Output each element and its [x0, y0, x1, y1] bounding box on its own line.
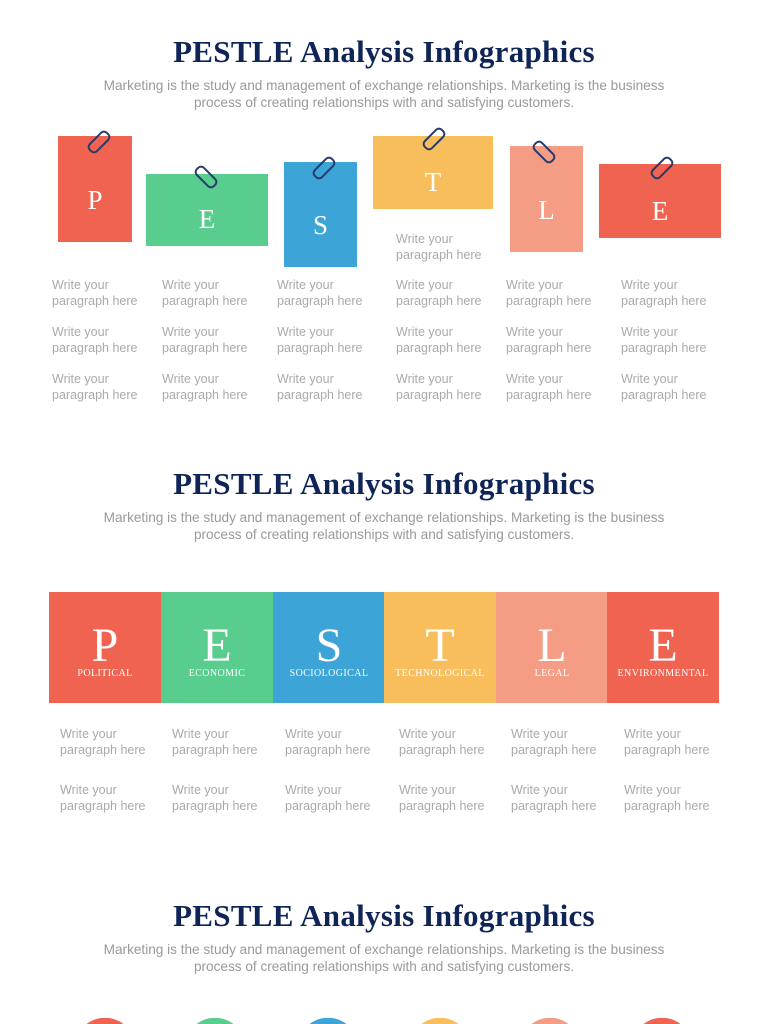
- box: technological: TECHNOLOGICAL: [395, 668, 485, 679]
- box: political: P: [92, 619, 118, 672]
- note: S: [284, 162, 357, 267]
- text grid 2: Write your paragraph here: [624, 783, 709, 813]
- text grid 1: Write your paragraph here: [52, 325, 137, 355]
- note: T: [373, 136, 493, 209]
- box: environmental: ENVIRONMENTAL: [617, 668, 709, 679]
- title 2: PESTLE Analysis Infographics: [173, 466, 595, 501]
- note: P: P: [87, 184, 103, 214]
- note: L: [510, 146, 583, 252]
- text grid 2: Write your paragraph here: [60, 783, 145, 813]
- text grid 1: Write your paragraph here: [162, 325, 247, 355]
- note: P: [58, 136, 132, 242]
- text grid 1: Write your paragraph here: [506, 372, 591, 402]
- text grid 2: Write your paragraph here: [285, 783, 370, 813]
- text grid 1: Write your paragraph here: [396, 372, 481, 402]
- subtitle 3: Marketing is the study and management of exchange relationships. Marketing is the business process of creating relationships with and satisfying customers.: [104, 942, 664, 974]
- text grid 1: Write your paragraph here: [52, 278, 137, 308]
- title 1: PESTLE Analysis Infographics: [173, 34, 595, 69]
- text grid 1: Write your paragraph here: [621, 325, 706, 355]
- title 3: PESTLE Analysis Infographics: [173, 898, 595, 933]
- box: political: [49, 592, 161, 703]
- clip: P: [86, 129, 112, 155]
- box: political: POLITICAL: [77, 668, 133, 679]
- note: E: [146, 174, 268, 246]
- text grid 2: Write your paragraph here: [172, 727, 257, 757]
- text grid 1: Write your paragraph here: [506, 278, 591, 308]
- text grid 1: Write your paragraph here: [277, 325, 362, 355]
- text grid 1: Write your paragraph here: [621, 278, 706, 308]
- clip: S: [311, 155, 337, 181]
- text grid 1: Write your paragraph here: [396, 325, 481, 355]
- box: technological: [384, 592, 496, 703]
- box: sociological: [273, 592, 385, 703]
- box: technological: T: [425, 619, 455, 672]
- subtitle 1: Marketing is the study and management of exchange relationships. Marketing is the business process of creating relationships with and satisfying customers.: [104, 78, 664, 110]
- text grid 1: Write your paragraph here: [277, 278, 362, 308]
- note: T: T: [425, 167, 441, 197]
- note: S: S: [313, 210, 328, 240]
- clip: E2: [649, 155, 675, 181]
- subtitle 2: Marketing is the study and management of exchange relationships. Marketing is the business process of creating relationships with and satisfying customers.: [104, 510, 664, 542]
- box: legal: [496, 592, 608, 703]
- note: E: E: [199, 204, 215, 234]
- text: T extra: Write your paragraph here: [396, 232, 481, 262]
- text grid 2: Write your paragraph here: [624, 727, 709, 757]
- text grid 1: Write your paragraph here: [506, 325, 591, 355]
- clip: T: [421, 126, 447, 152]
- note: E2: E: [652, 196, 668, 226]
- box row: [49, 592, 719, 703]
- text grid 1: Write your paragraph here: [277, 372, 362, 402]
- box: legal: LEGAL: [535, 668, 569, 679]
- text grid 2: Write your paragraph here: [60, 727, 145, 757]
- text grid 2: Write your paragraph here: [172, 783, 257, 813]
- text grid 1: Write your paragraph here: [162, 278, 247, 308]
- text grid 2: Write your paragraph here: [511, 727, 596, 757]
- text grid 1: Write your paragraph here: [396, 278, 481, 308]
- note: E2: [599, 164, 721, 238]
- note: L: L: [538, 194, 555, 224]
- box: sociological: SOCIOLOGICAL: [290, 668, 368, 679]
- clip: E: [193, 164, 219, 190]
- box: economic: ECONOMIC: [189, 668, 245, 679]
- text grid 1: [52, 278, 706, 402]
- box: economic: [161, 592, 273, 703]
- text grid 2: [60, 727, 709, 813]
- text grid 1: Write your paragraph here: [162, 372, 247, 402]
- box: sociological: S: [316, 619, 342, 672]
- text grid 2: Write your paragraph here: [511, 783, 596, 813]
- clip: L: [531, 139, 557, 165]
- box: legal: L: [537, 619, 567, 672]
- text grid 1: Write your paragraph here: [52, 372, 137, 402]
- text grid 1: Write your paragraph here: [621, 372, 706, 402]
- text grid 2: Write your paragraph here: [285, 727, 370, 757]
- circles row: [86, 1018, 680, 1024]
- box: environmental: E: [648, 619, 678, 672]
- text grid 2: Write your paragraph here: [399, 783, 484, 813]
- box: economic: E: [202, 619, 232, 672]
- box: environmental: [607, 592, 719, 703]
- text grid 2: Write your paragraph here: [399, 727, 484, 757]
